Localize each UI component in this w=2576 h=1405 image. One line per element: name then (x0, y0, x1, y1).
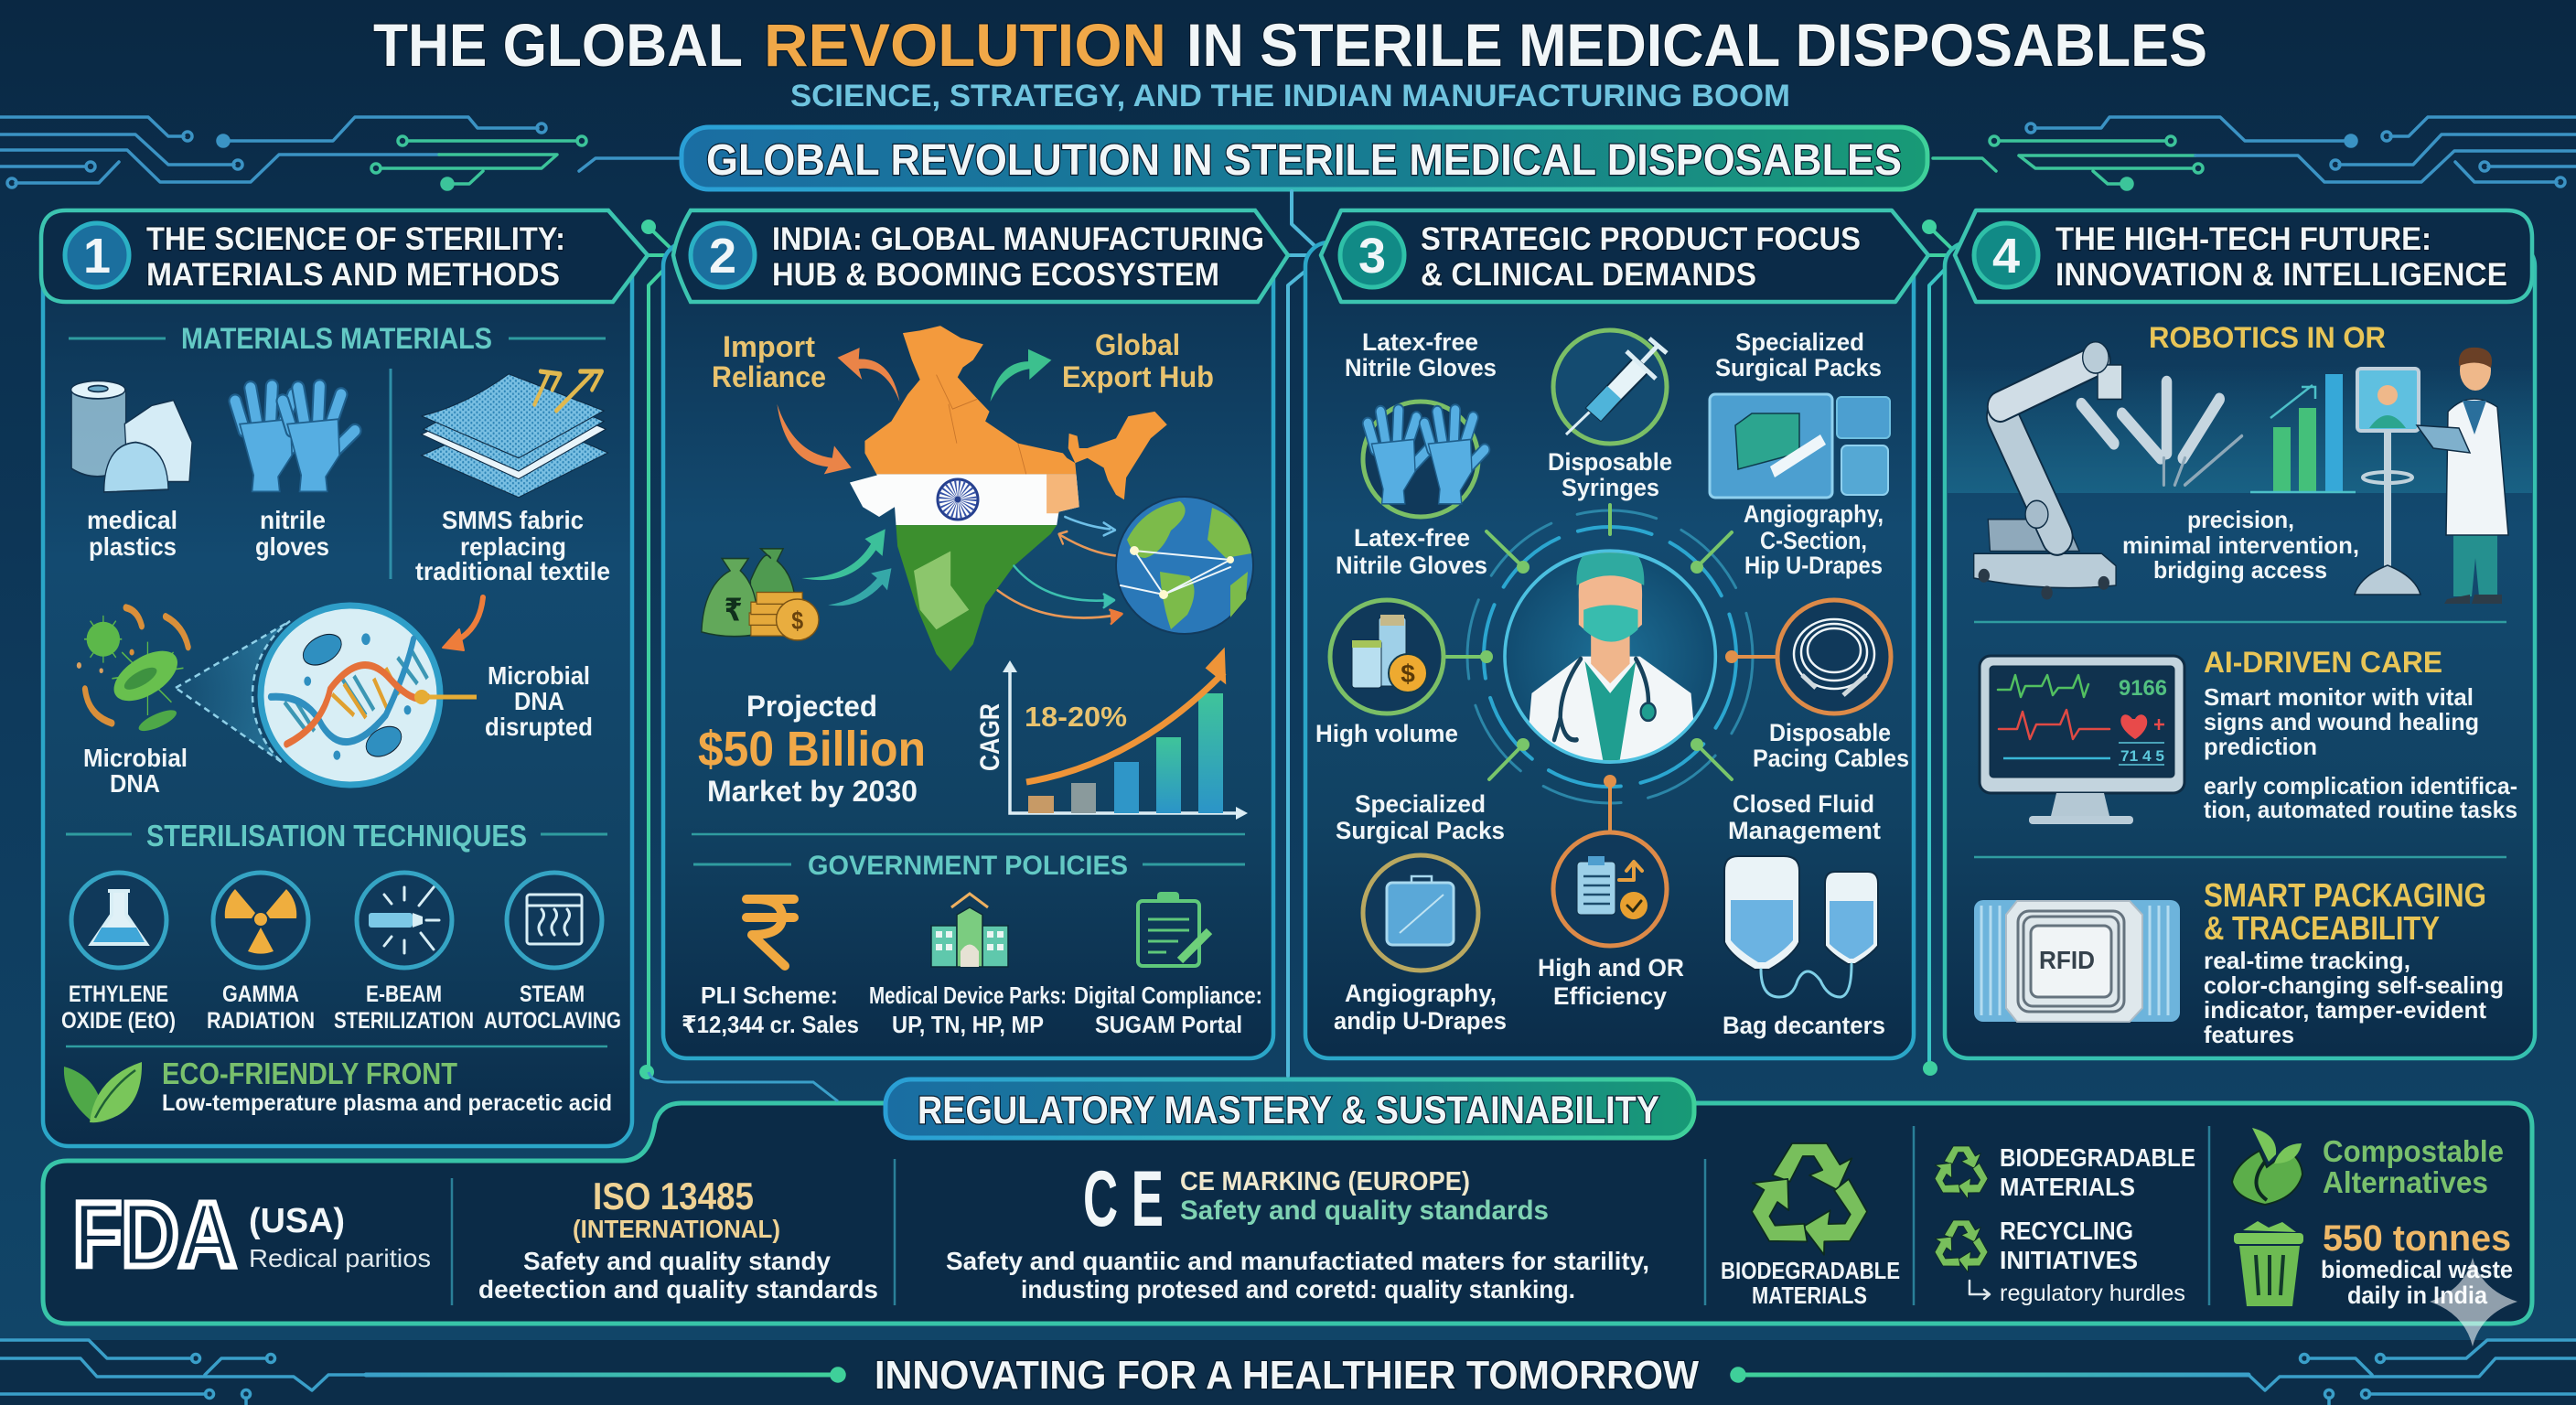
waste stat text: biomedical waste (2321, 1256, 2513, 1283)
labels: product items (1315, 328, 1909, 1039)
labels: product items: C-Section, (1760, 527, 1867, 554)
waste stat text: daily in India (2347, 1282, 2488, 1309)
labels: product items: Syringes (1562, 474, 1659, 501)
labels: product items: Angiography, (1744, 500, 1884, 528)
panel 1 header (41, 210, 648, 302)
icon: rupee (746, 899, 794, 966)
label: SMMS fabric: replacing (460, 532, 566, 561)
panel 4 header: THE HIGH-TECH FUTURE: (2055, 221, 2431, 257)
icon: smart monitor: 9166 (2119, 676, 2167, 701)
label: biodegradable materials: MATERIALS (1752, 1282, 1867, 1309)
panel 2 header: INDIA: GLOBAL MANUFACTURING (772, 221, 1264, 257)
waste stat text (2321, 1218, 2513, 1309)
Ashoka chakra (938, 479, 978, 520)
CE marking block: industing protesed and coretd: quality stanking. (1021, 1275, 1575, 1303)
panel 3 header: 3 (1358, 229, 1386, 284)
label: nitrile gloves: nitrile (260, 506, 326, 534)
divider (692, 833, 1245, 835)
labels: product items: High and OR (1538, 954, 1684, 981)
FDA logo and text: FDA (73, 1184, 236, 1286)
heading: robotics: ROBOTICS IN OR (2149, 321, 2386, 354)
labels: sterilisation methods: E-BEAM (366, 981, 442, 1007)
panel 1 header: 1 (83, 229, 111, 284)
label: microbial DNA (83, 744, 188, 798)
icon: waste bin (2234, 1221, 2303, 1306)
icon: fluid bags and decanter tube (1724, 856, 1878, 997)
smart packaging text: real-time tracking, (2204, 947, 2410, 974)
labels: sterilisation methods: ETHYLENE (69, 981, 168, 1007)
labels: product items: Pacing Cables (1753, 745, 1909, 772)
panel 4 header: INNOVATION & INTELLIGENCE (2055, 257, 2507, 293)
label: medical plastics: plastics (89, 532, 177, 561)
biodegradable materials text: BIODEGRADABLE (2000, 1143, 2195, 1172)
compostable alternatives text: Compostable (2323, 1134, 2504, 1168)
panel 4 header: 4 (1992, 229, 2020, 284)
compostable alternatives text (2323, 1134, 2504, 1199)
robotics backdrop glow (1948, 366, 2532, 493)
label: medical plastics (87, 506, 177, 561)
icon: small recycling symbol (1929, 1220, 1992, 1276)
ISO 13485 block: deetection and quality standards (478, 1275, 878, 1303)
labels: sterilisation methods: AUTOCLAVING (484, 1008, 621, 1034)
icon: smart monitor (1980, 656, 2184, 824)
smart packaging text: features (2204, 1021, 2294, 1048)
pointer: disrupted site (414, 690, 477, 704)
eco-friendly front text: ECO-FRIENDLY FRONT (162, 1056, 457, 1090)
icon: surgical robot (1974, 342, 2242, 600)
label: biodegradable materials (1721, 1257, 1900, 1309)
stat: projected market (698, 690, 926, 808)
compostable alternatives text: Alternatives (2323, 1165, 2488, 1199)
circuit lines: top left (0, 117, 680, 189)
panel 1 header: THE SCIENCE OF STERILITY: (146, 221, 565, 257)
heading: sterilisation techniques: STERILISATION TECHNIQUES (146, 819, 527, 853)
labels: policies (682, 981, 1262, 1038)
eco-friendly front text (162, 1056, 612, 1116)
label: SMMS fabric: traditional textile (415, 557, 610, 585)
CE marking block: CE MARKING (EUROPE) (1180, 1167, 1470, 1196)
label: medical plastics: medical (87, 506, 177, 534)
labels: policies: PLI Scheme: (701, 981, 838, 1009)
robotics text: minimal intervention, (2122, 531, 2359, 559)
labels: sterilisation methods: STEAM (520, 981, 585, 1007)
labels: product items: High volume (1315, 720, 1458, 747)
labels: product items: Disposable (1548, 448, 1672, 476)
icon: magnified DNA (176, 606, 440, 785)
smart packaging text (2204, 876, 2504, 1048)
panel 2 header (673, 210, 1288, 302)
icon: gamma radiation (213, 873, 308, 968)
icon circle: angiography drape (1363, 855, 1478, 971)
label: global export hub (1062, 328, 1214, 393)
label: global export hub: Global (1095, 328, 1180, 361)
icon: telepresence cart (2355, 369, 2420, 595)
icon circle: high volume: $ (1401, 660, 1415, 688)
label: microbial DNA disrupted: disrupted (485, 713, 593, 741)
icon: money bags and coins: $ (791, 607, 803, 636)
title: IN STERILE MEDICAL DISPOSABLES (1186, 11, 2207, 79)
icon: big recycling symbol (1739, 1143, 1877, 1262)
recycling initiatives text: INITIATIVES (2000, 1246, 2138, 1274)
ISO 13485 block (478, 1174, 878, 1303)
stat: projected market: Market by 2030 (707, 775, 918, 808)
icon: money bags and coins: ₹ (724, 592, 743, 627)
icon: money bags and coins (702, 549, 819, 640)
icon: compostable sprout globe (2232, 1128, 2302, 1205)
icon: RFID tag: RFID (2039, 946, 2095, 974)
icon circle: gloves (1363, 402, 1485, 517)
panel 4: high-tech future (1945, 210, 2535, 1058)
AI-driven care text: early complication identifica- (2204, 772, 2517, 799)
biodegradable materials text (2000, 1143, 2195, 1201)
chart: CAGR bars (975, 654, 1248, 820)
chart: robotics bars (2250, 374, 2356, 492)
central doctor illustration (1505, 543, 1715, 762)
label: microbial DNA: Microbial (83, 744, 188, 772)
labels: product items: Hip U-Drapes (1744, 552, 1883, 579)
smart packaging text: color-changing self-sealing (2204, 971, 2504, 999)
recycling initiatives text: regulatory hurdles (2000, 1281, 2185, 1306)
panel 4 header (1955, 210, 2532, 302)
label: global export hub: Export Hub (1062, 360, 1214, 393)
labels: product items: Management (1728, 817, 1881, 844)
regulatory banner (886, 1079, 1694, 1138)
labels: product items: Nitrile Gloves (1345, 354, 1497, 381)
robotics text (2122, 506, 2359, 584)
labels: product items: Disposable (1769, 719, 1891, 746)
AI-driven care text (2204, 646, 2517, 823)
label: microbial DNA disrupted: DNA (514, 687, 564, 715)
panel 3 header (1321, 210, 1928, 302)
labels: product items: Latex-free (1362, 328, 1478, 356)
icon circle: high volume (1330, 600, 1444, 713)
icon circle: pacing cables (1777, 600, 1891, 713)
AI-driven care text: Smart monitor with vital (2204, 683, 2474, 711)
icon: small recycling symbol (1929, 1146, 1992, 1203)
icon circle: OR efficiency (1553, 832, 1667, 946)
labels: product items: Surgical Packs (1336, 817, 1505, 844)
label: import reliance (712, 330, 826, 393)
title (373, 11, 2207, 79)
icon: smart monitor: 71 4 5 (2120, 747, 2164, 765)
panel 3 header: & CLINICAL DEMANDS (1421, 257, 1756, 293)
AI-driven care text: tion, automated routine tasks (2204, 796, 2517, 823)
icon: leaves (64, 1062, 142, 1122)
subtitle: SCIENCE, STRATEGY, AND THE INDIAN MANUFACTURING BOOM (790, 79, 1790, 113)
icon: globe (1116, 497, 1253, 634)
heading: government policies: GOVERNMENT POLICIES (808, 851, 1128, 881)
circuit lines: top right (1933, 117, 2576, 189)
icon: ethylene oxide flask (71, 873, 166, 968)
footer circuit lines: right (1732, 1340, 2576, 1405)
icon: RFID tag (1974, 900, 2180, 1022)
smart packaging text: indicator, tamper-evident (2204, 996, 2486, 1024)
labels: policies: Digital Compliance: (1074, 981, 1262, 1009)
label: nitrile gloves: gloves (255, 532, 329, 561)
smart packaging text: SMART PACKAGING (2204, 876, 2486, 914)
watermark star (2430, 1258, 2517, 1346)
heading: materials: MATERIALS MATERIALS (181, 322, 492, 355)
labels: product items: Surgical Packs (1715, 354, 1882, 381)
labels: policies: SUGAM Portal (1095, 1011, 1242, 1038)
labels: sterilisation methods (61, 981, 621, 1034)
label: import reliance: Reliance (712, 360, 826, 393)
robotics text: bridging access (2153, 556, 2327, 584)
labels: product items: Closed Fluid (1733, 790, 1874, 818)
panel 1 header: MATERIALS AND METHODS (146, 257, 560, 293)
labels: product items: Latex-free (1354, 524, 1470, 552)
chart: CAGR bars: 18-20% (1025, 701, 1127, 733)
panel 2 header: HUB & BOOMING ECOSYSTEM (772, 257, 1219, 293)
icon: e-beam (357, 873, 452, 968)
AI-driven care text: AI-DRIVEN CARE (2204, 646, 2442, 679)
main banner: GLOBAL REVOLUTION IN STERILE MEDICAL DISPOSABLES (706, 136, 1902, 185)
waste stat text: 550 tonnes (2323, 1218, 2511, 1259)
recycling initiatives text: RECYCLING (2000, 1217, 2133, 1245)
ISO 13485 block: ISO 13485 (593, 1174, 754, 1217)
arrows around map (777, 348, 1122, 624)
divider (390, 369, 392, 579)
label: biodegradable materials: BIODEGRADABLE (1721, 1257, 1900, 1284)
map of India (843, 321, 1167, 682)
divider (452, 1126, 2209, 1305)
icon: medical plastics (71, 381, 192, 492)
footer text: INNOVATING FOR A HEALTHIER TOMORROW (875, 1353, 1699, 1398)
divider (1974, 621, 2506, 623)
CE marking block: C E (1083, 1155, 1164, 1243)
labels: sterilisation methods: STERILIZATION (334, 1008, 474, 1034)
labels: product items: Bag decanters (1723, 1012, 1885, 1039)
connector arrow 2 to 3 (1288, 191, 1325, 1076)
ISO 13485 block: Safety and quality standy (523, 1247, 831, 1275)
footer band (0, 1340, 2576, 1405)
icon: medical device park (931, 894, 1008, 967)
FDA logo and text (73, 1184, 431, 1286)
labels: product items: andip U-Drapes (1334, 1007, 1507, 1035)
arrow: orange curved (443, 597, 483, 650)
regulatory banner: REGULATORY MASTERY & SUSTAINABILITY (918, 1089, 1659, 1132)
chart: CAGR bars: CAGR (975, 703, 1005, 771)
label: import reliance: Import (723, 330, 815, 363)
eco-friendly front text: Low-temperature plasma and peracetic acid (162, 1090, 612, 1116)
label: SMMS fabric: SMMS fabric (442, 506, 584, 534)
connector to banner (649, 1072, 838, 1101)
icon: SMMS fabric (422, 371, 608, 498)
icon: digital compliance clipboard (1138, 892, 1209, 966)
divider (66, 1046, 607, 1047)
labels: product items: Efficiency (1553, 982, 1667, 1010)
icon: surgical packs (1710, 394, 1890, 498)
divider (1974, 856, 2506, 858)
ISO 13485 block: (INTERNATIONAL) (573, 1215, 780, 1243)
label: microbial DNA disrupted: Microbial (488, 661, 590, 690)
stat: projected market: Projected (746, 690, 877, 723)
connector arrow 3 to 4 (1924, 221, 1959, 1074)
panel 1: science of sterility (41, 210, 648, 1146)
panel 2 header: 2 (709, 229, 736, 284)
panel 3 header: STRATEGIC PRODUCT FOCUS (1421, 221, 1861, 257)
label: microbial DNA disrupted (485, 661, 593, 741)
panel: regulatory mastery and sustainability (43, 1072, 2532, 1324)
labels: product items: Nitrile Gloves (1336, 552, 1487, 579)
labels: policies: UP, TN, HP, MP (892, 1011, 1044, 1038)
labels: sterilisation methods: RADIATION (207, 1008, 315, 1034)
labels: product items: Angiography, (1345, 980, 1497, 1007)
icon: steam autoclave (507, 873, 602, 968)
footer circuit lines: left (0, 1340, 844, 1405)
icon: microbes (77, 607, 188, 735)
labels: sterilisation methods: GAMMA (222, 981, 299, 1007)
labels: product items: Specialized (1355, 790, 1486, 818)
connector arrow 1 to 2 (641, 221, 678, 1078)
AI-driven care text: prediction (2204, 733, 2317, 760)
labels: sterilisation methods: OXIDE (EtO) (61, 1008, 176, 1034)
label: SMMS fabric (415, 506, 610, 585)
labels: policies: ₹12,344 cr. Sales (682, 1011, 859, 1038)
label: nitrile gloves (255, 506, 329, 561)
CE marking block: Safety and quantiic and manufactiated maters for starility, (946, 1247, 1649, 1275)
icon circle: syringe (1553, 330, 1667, 444)
icon: doctor with tablet (2417, 348, 2508, 604)
hub rings and connectors (1446, 505, 1776, 831)
FDA logo and text: Redical paritios (249, 1244, 431, 1272)
stat: projected market: $50 Billion (698, 722, 926, 777)
labels: product items: Specialized (1735, 328, 1864, 356)
title: REVOLUTION (764, 11, 1166, 79)
FDA logo and text: (USA) (249, 1202, 345, 1240)
panel 2: India manufacturing hub (663, 210, 1288, 1058)
CE marking block: Safety and quality standards (1180, 1196, 1549, 1226)
title: THE GLOBAL (373, 11, 743, 79)
robotics text: precision, (2187, 506, 2294, 533)
recycling initiatives text (1970, 1217, 2185, 1306)
label: microbial DNA: DNA (110, 769, 160, 798)
biodegradable materials text: MATERIALS (2000, 1173, 2135, 1201)
icon: nitrile gloves (235, 386, 355, 491)
panel 3: strategic product focus (1305, 210, 1928, 1058)
AI-driven care text: signs and wound healing (2204, 708, 2479, 735)
labels: policies: Medical Device Parks: (869, 981, 1067, 1009)
smart packaging text: & TRACEABILITY (2204, 909, 2440, 947)
CE marking block (946, 1155, 1649, 1303)
